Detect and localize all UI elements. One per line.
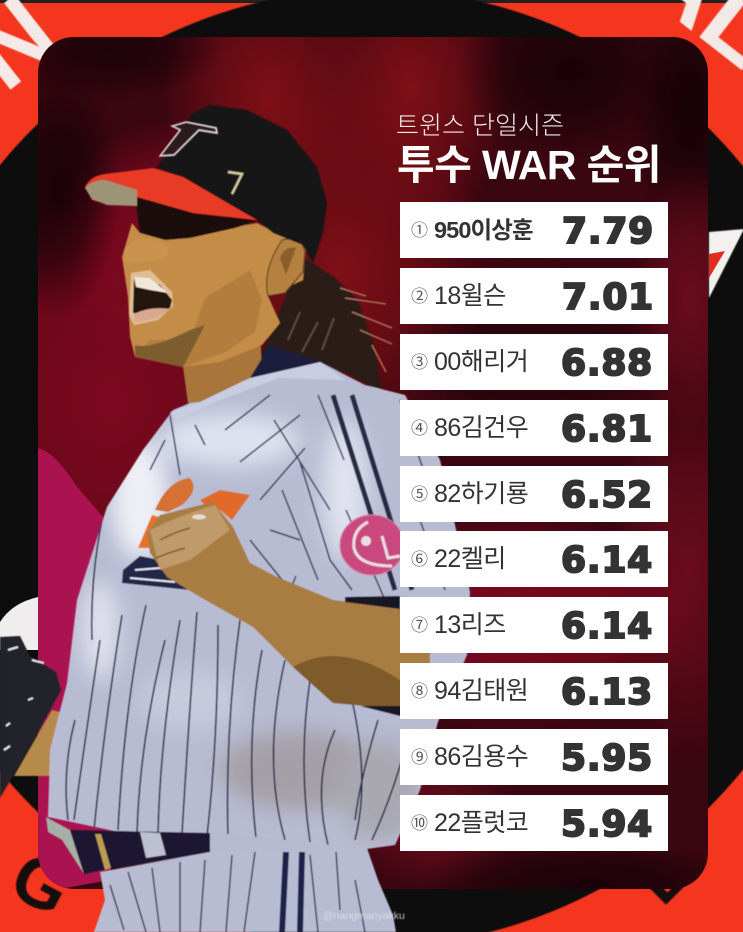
cap crown (157, 105, 327, 263)
row 7: 6.14 (561, 606, 653, 647)
row 6: 22켈리 (434, 545, 506, 573)
belt and buckle (46, 817, 368, 874)
row 6 (400, 531, 668, 587)
row 9: 86김용수 (434, 743, 528, 771)
row 7: ⑦ (411, 611, 428, 636)
row 6: ⑥ (411, 545, 428, 570)
row 5 (400, 466, 668, 522)
row 9: ⑨ (411, 743, 428, 768)
row 10: ⑩ (411, 809, 428, 834)
row 8: 94김태원 (434, 677, 528, 705)
row 2: 7.01 (562, 277, 654, 318)
background ring lettering: bottom: ㄷ (619, 828, 722, 931)
row 3: ③ (411, 348, 428, 373)
row 3: 00해리거 (434, 348, 528, 376)
pinstripes: lower torso (58, 520, 410, 845)
row 7 (400, 597, 668, 653)
cap letter T (160, 122, 217, 156)
row 5: 82하기룡 (434, 480, 528, 508)
subtitle: 트윈스 단일시즌 (396, 112, 564, 140)
row 8 (400, 663, 668, 719)
face (122, 223, 306, 367)
ear (267, 239, 305, 296)
nose (124, 239, 168, 262)
row 7: 13리즈 (434, 611, 506, 639)
fist and forearm (147, 502, 440, 718)
row 8: 6.13 (561, 672, 653, 713)
row 3 (400, 334, 668, 390)
background: white triangle fragment at right (709, 229, 743, 298)
player photo (0, 105, 470, 932)
collar (170, 362, 345, 420)
background ring lettering: bottom: G (0, 836, 84, 931)
LG sleeve patch (340, 515, 404, 575)
row 3: 6.88 (561, 343, 653, 384)
heading (396, 112, 661, 188)
row 9 (400, 729, 668, 785)
row 1: ① (411, 216, 428, 241)
row 1: 950이상훈 (434, 217, 533, 243)
row 4: ④ (411, 414, 428, 439)
neck (183, 330, 262, 403)
pants (94, 848, 396, 932)
eye shadow under visor (135, 197, 257, 240)
row 10: 5.94 (561, 804, 653, 845)
row 2 (400, 268, 668, 324)
row 4: 6.81 (561, 409, 653, 450)
row 9: 5.95 (561, 738, 653, 779)
row 5: 6.52 (561, 475, 653, 516)
ranking list (400, 202, 668, 851)
background ring lettering: bottom (15, 857, 686, 911)
row 8: ⑧ (411, 677, 428, 702)
jersey logo (122, 478, 250, 590)
row 6: 6.14 (561, 540, 653, 581)
row 5: ⑤ (411, 480, 428, 505)
row 2: ② (411, 282, 428, 307)
row 1 (400, 202, 668, 258)
row 1: 7.79 (562, 211, 654, 252)
row 4: 86김건우 (434, 414, 528, 442)
left arm and glove of catcher (0, 636, 61, 798)
row 4 (400, 400, 668, 456)
hair (250, 258, 392, 392)
row 10: 22플럿코 (434, 809, 528, 837)
cap number 7 (228, 172, 242, 194)
watermark: @nangmanyakku (323, 910, 405, 922)
head (85, 105, 345, 420)
sleeve stripes (333, 395, 412, 590)
background ring lettering: top (0, 0, 743, 90)
cap visor (85, 168, 257, 220)
mouth (129, 270, 173, 325)
row 2: 18윌슨 (434, 282, 506, 310)
jersey (48, 362, 470, 850)
pinstripes: upper chest and sleeve (149, 394, 446, 598)
pink blurred figure behind player (38, 448, 120, 889)
background: white ball fragment at left (0, 597, 38, 650)
title: 투수 WAR 순위 (397, 142, 661, 188)
row 10 (400, 795, 668, 851)
